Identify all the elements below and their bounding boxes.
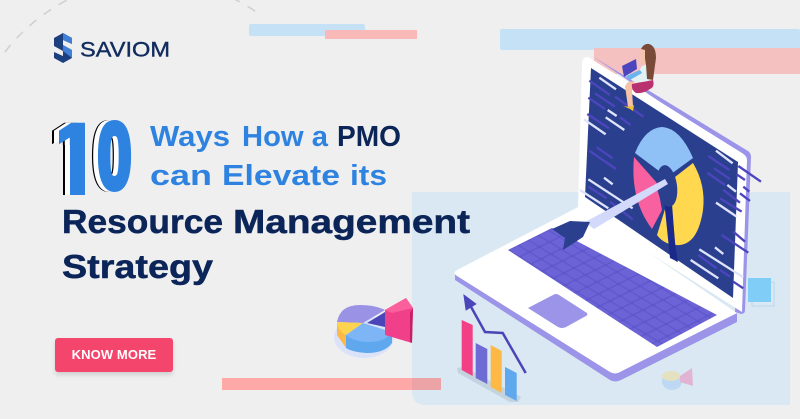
button: know more <box>55 338 173 372</box>
big number 10 <box>52 104 132 208</box>
face <box>641 49 645 65</box>
heading: Ways How a PMO can Elevate its: Ways <box>150 121 230 153</box>
heading: Ways How a PMO can Elevate its: can <box>150 160 212 192</box>
faded small pie chart <box>662 368 693 390</box>
big number 10: 0 <box>98 104 132 208</box>
heading: Ways How a PMO can Elevate its: its <box>350 160 387 192</box>
screen code lines <box>580 78 761 219</box>
big number 10: 0 <box>93 104 127 208</box>
trackpad <box>528 294 587 328</box>
heading: Resource Management Strategy: Resource <box>62 203 223 240</box>
pie chart wedge <box>385 298 413 343</box>
logo: Saviom <box>54 33 170 63</box>
hair <box>641 44 656 80</box>
person sitting on laptop <box>622 44 656 111</box>
heading: Resource Management Strategy <box>62 203 470 286</box>
shoe <box>623 105 634 111</box>
keyboard <box>508 228 717 347</box>
skirt <box>632 80 654 93</box>
keyboard in lap <box>626 70 642 80</box>
3D pie chart <box>334 298 413 358</box>
heading: Resource Management Strategy: Management <box>233 203 470 240</box>
button: know more: KNOW MORE <box>72 347 156 362</box>
icon: Saviom hexagon mark <box>54 33 72 63</box>
heading: Ways How a PMO can Elevate its <box>150 121 401 192</box>
heading: Ways How a PMO can Elevate its: PMO <box>337 121 401 153</box>
big number 10: 0 <box>92 104 126 208</box>
icon: square accents <box>748 278 774 306</box>
laptop screen <box>578 56 761 314</box>
arrow pointer <box>552 179 668 250</box>
pie chart on screen <box>633 127 704 262</box>
top <box>634 64 648 83</box>
logo wordmark: SAVIOM <box>80 38 170 62</box>
heading: Ways How a PMO can Elevate its: Elevate <box>222 160 340 192</box>
bar chart with arrow <box>457 294 526 402</box>
laptop <box>622 59 637 77</box>
laptop base <box>454 206 737 382</box>
heading: Resource Management Strategy: Strategy <box>62 248 214 285</box>
heading: Ways How a PMO can Elevate its: How a <box>242 121 329 153</box>
leg <box>625 80 642 107</box>
